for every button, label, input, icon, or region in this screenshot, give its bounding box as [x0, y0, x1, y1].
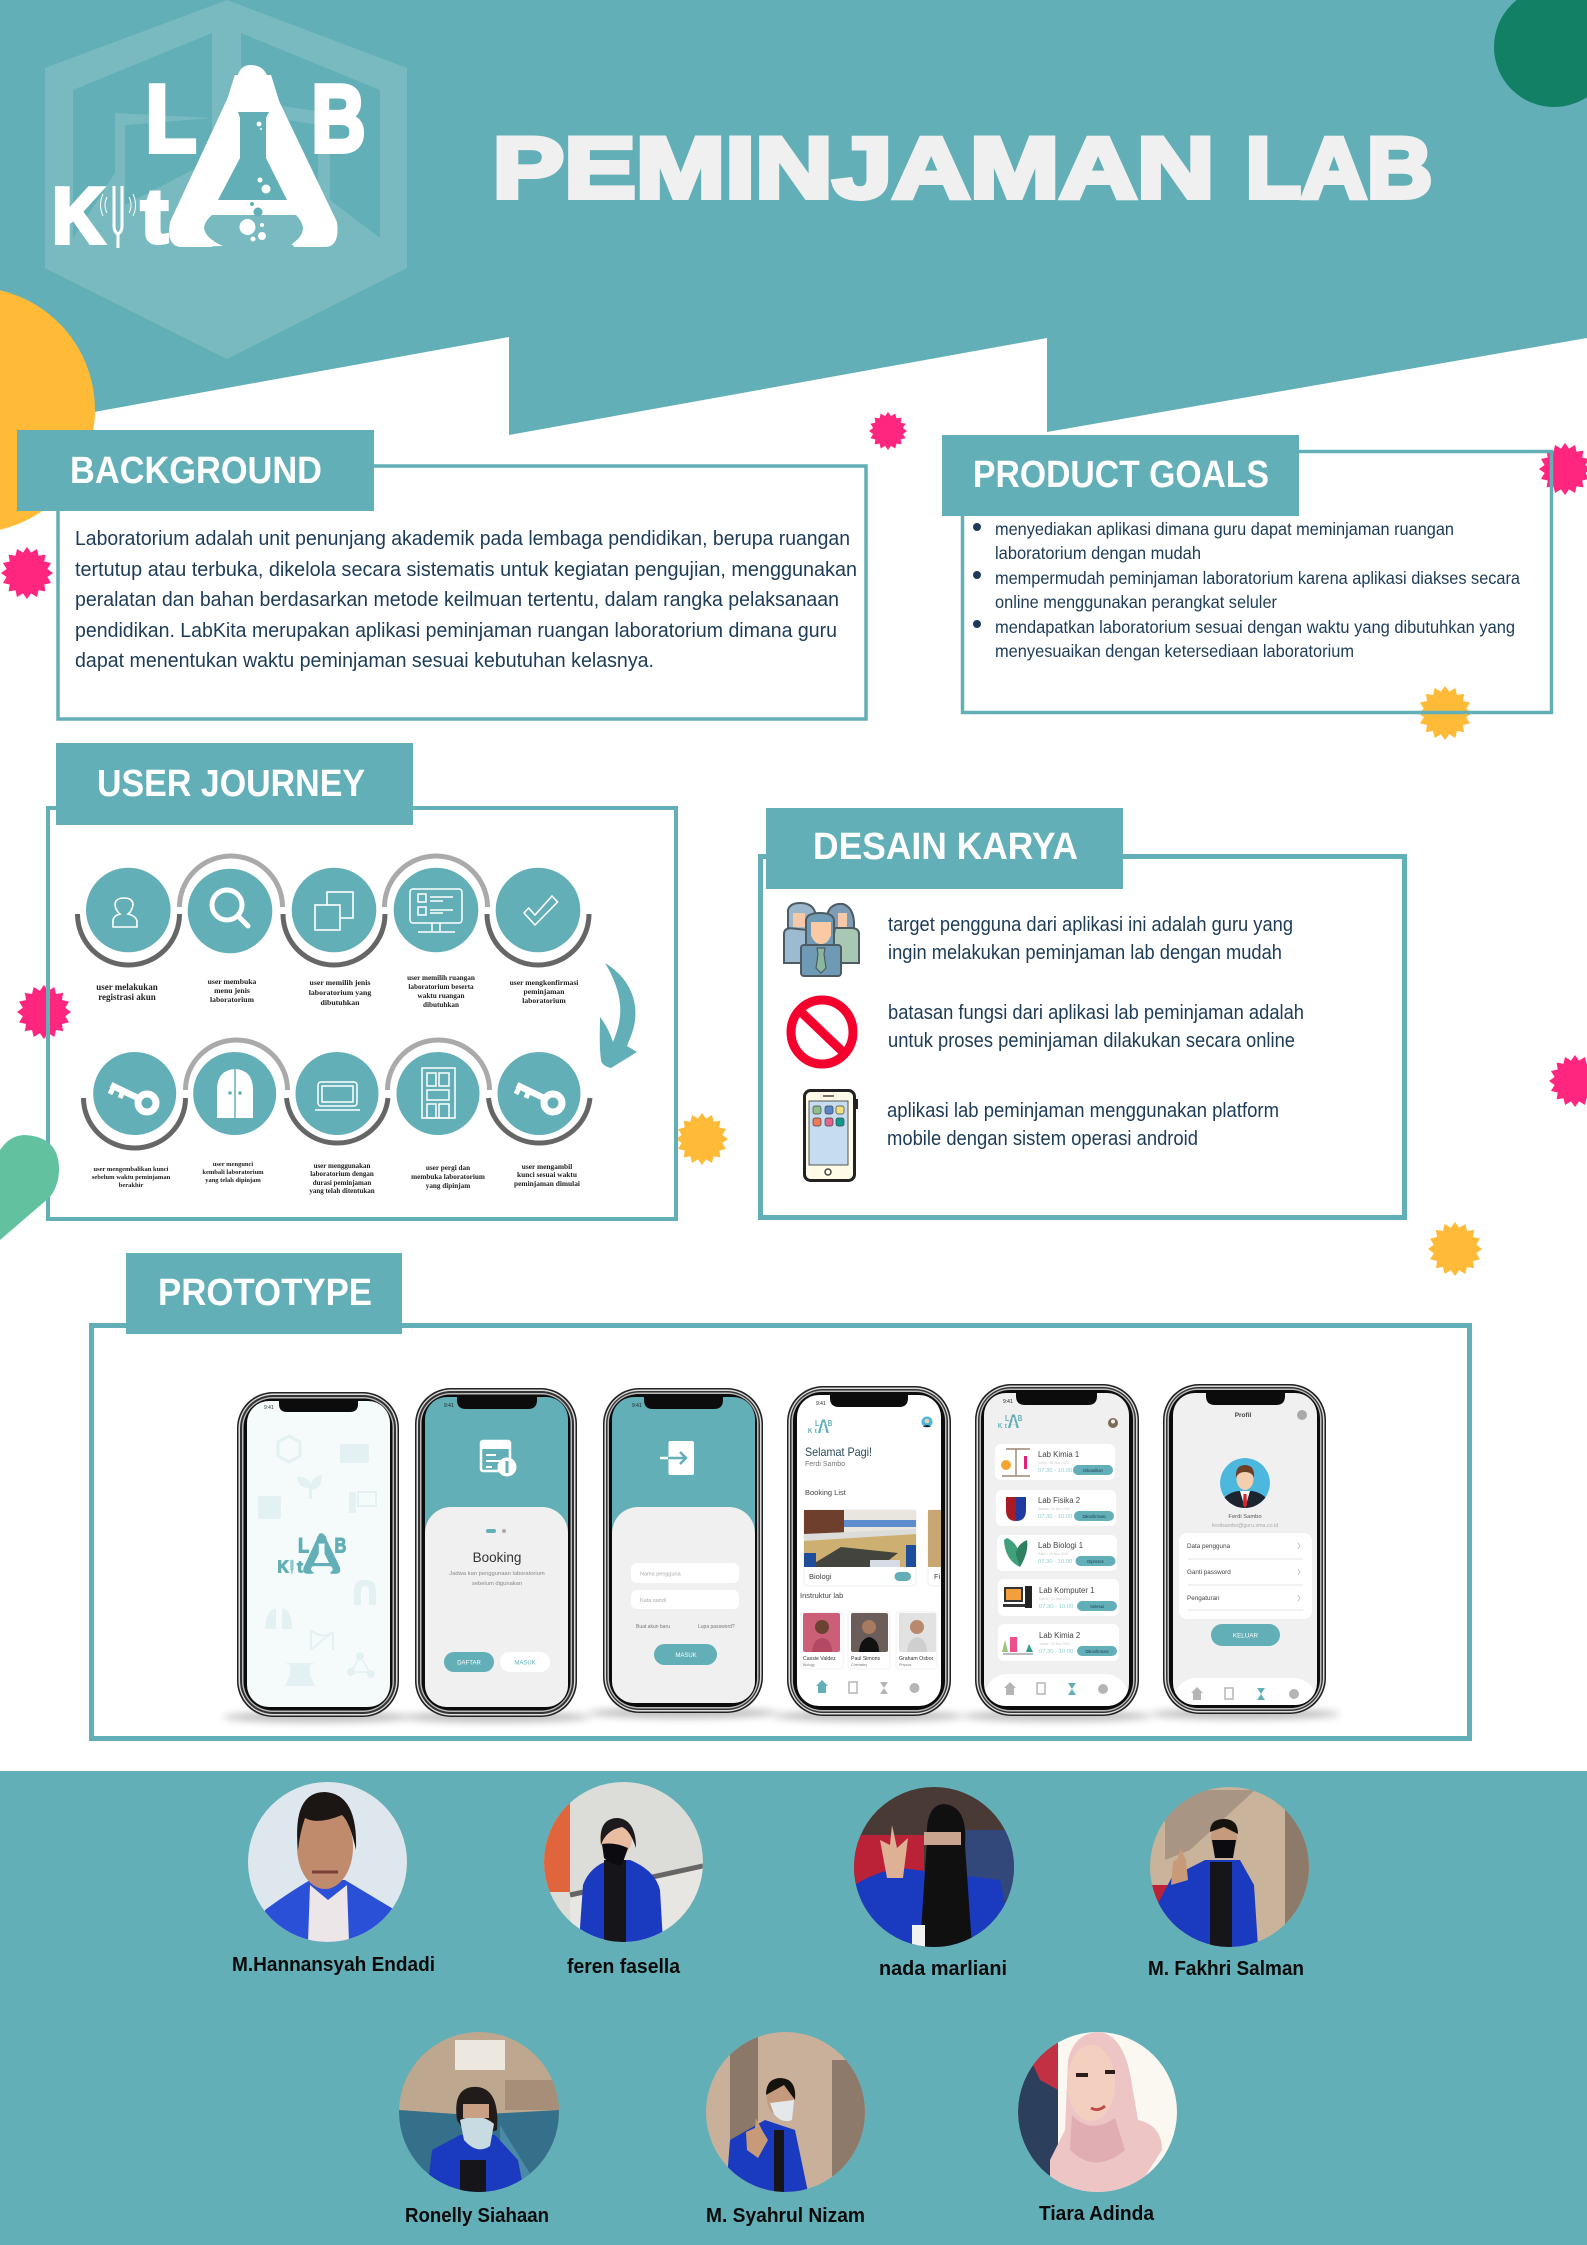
heading: product goals: PRODUCT GOALS [973, 454, 1269, 496]
team member 1: M.Hannansyah Endadi [232, 1954, 435, 1976]
labels row 2: user mengambil [522, 1162, 572, 1171]
icon: search [212, 890, 248, 926]
header banner [0, 0, 1587, 435]
labels row 1: dibutuhkan [423, 1001, 459, 1009]
phone 1: splash [237, 1392, 399, 1717]
icon: calendar [481, 1441, 516, 1476]
avatar [1219, 1458, 1271, 1510]
instructor cards: Chemistry [851, 1663, 867, 1667]
title: PEMINJAMAN [492, 120, 1214, 216]
phone 6: profile: Profil [1235, 1412, 1251, 1419]
logo small: B [335, 1534, 346, 1557]
title [492, 120, 1432, 216]
labels row 1: user memilih ruangan [407, 974, 475, 982]
team member 6 [706, 2032, 866, 2227]
labels row 2: kunci sesuai waktu [517, 1170, 577, 1179]
icon: mobile phone [804, 1090, 858, 1180]
lab photo card: Biologi [809, 1572, 832, 1581]
icon: double door [217, 1069, 253, 1118]
card titles: Lab Biologi 1 [1038, 1541, 1083, 1550]
logo small: K [998, 1423, 1002, 1430]
phone 2: onboarding: Jadwa kan penggunaan laboratorium [449, 1571, 545, 1577]
labels row 1 [96, 974, 578, 1009]
icon: copies [315, 892, 353, 930]
heading: background: BACKGROUND [70, 450, 322, 492]
heading: prototype: PROTOTYPE [158, 1272, 372, 1314]
decorative burst: yellow desain [1428, 1222, 1482, 1276]
labels row 1: menu jenis [214, 986, 250, 995]
labels row 2: durasi peminjaman [313, 1179, 371, 1187]
icon: check [524, 896, 558, 925]
text: function limits: batasan fungsi dari aplikasi lab peminjaman adalah [888, 1002, 1304, 1024]
logo small: L [1005, 1413, 1009, 1423]
card times: 07.30 - 10.00 [1038, 1559, 1072, 1565]
card times: 07.30 - 10.00 [1039, 1604, 1073, 1610]
labels row 1: laboratorium beserta [408, 983, 474, 991]
card titles: Lab Fisika 2 [1038, 1496, 1080, 1505]
second card: Fi [934, 1572, 941, 1581]
card dates: Jumat / 22 Nov 2022 [1039, 1642, 1070, 1646]
settings card: Ganti password [1187, 1569, 1231, 1576]
instructor cards: Physics [899, 1663, 912, 1667]
phone 3: login: Buat akun baru [636, 1624, 670, 1630]
icon: door [422, 1068, 455, 1118]
icon: sign in door [660, 1441, 694, 1475]
status labels: Selesai [1090, 1604, 1104, 1609]
icon: laptop [315, 1082, 360, 1110]
phone 3: login: MASUK [675, 1653, 697, 1659]
labels row 2: user mengembalikan kunci [93, 1166, 169, 1173]
labels row 2: membuka laboratorium [411, 1173, 485, 1181]
logo small: t [297, 1557, 303, 1576]
logo small: L [815, 1418, 819, 1428]
logo small: K [278, 1556, 289, 1576]
decorative circle: yellow left [0, 287, 95, 533]
card dates: Kamis / 21 Nov 2022 [1039, 1597, 1071, 1601]
decorative burst: yellow centre [676, 1113, 728, 1165]
phone 4: home: 9:41 [816, 1401, 826, 1407]
card titles [1038, 1450, 1094, 1640]
team member 7 [1018, 2032, 1178, 2225]
instructor cards [801, 1612, 937, 1669]
nav bar [816, 1680, 920, 1694]
icon: prohibited [791, 1000, 853, 1064]
labels row 1: laboratorium yang [309, 988, 371, 997]
panel: product goals [942, 435, 1552, 712]
phone 6: profile: KELUAR [1233, 1632, 1259, 1640]
logo: LabKita: t [141, 174, 168, 260]
text: function limits [888, 1002, 1304, 1052]
logo small: B [828, 1418, 832, 1428]
text: background body [75, 527, 857, 672]
team band [0, 1771, 1587, 2245]
team member 2: feren fasella [567, 1956, 681, 1978]
text: platform: mobile dengan sistem operasi android [887, 1128, 1198, 1150]
text: target users [888, 914, 1293, 964]
logo small: t [815, 1428, 818, 1435]
decorative burst: pink far right [1549, 1055, 1587, 1107]
status labels: Dibatalkan [1083, 1468, 1104, 1473]
card times: 07.30 - 10.00 [1039, 1649, 1073, 1655]
phone 4: home: Booking List [805, 1488, 847, 1497]
text: platform: aplikasi lab peminjaman menggunakan platform [887, 1100, 1279, 1122]
logo: LabKita: L [146, 66, 196, 172]
list: product goals: mempermudah peminjaman laboratorium karena aplikasi diakses secara [995, 568, 1520, 588]
phone 2: onboarding: 9:41 [444, 1403, 454, 1409]
arcs row 2 [84, 1040, 590, 1148]
logo small: B [1018, 1413, 1022, 1423]
logo small [278, 1523, 346, 1585]
labels row 1: laboratorium [210, 995, 255, 1004]
icon: people [784, 903, 859, 976]
text: background body: pendidikan. LabKita merupakan aplikasi peminjaman ruangan laboratorium dimana guru [75, 619, 837, 642]
phone 5: lab list [975, 1384, 1139, 1734]
nav bar [1004, 1682, 1108, 1695]
text: function limits: untuk proses peminjaman dilakukan secara online [888, 1030, 1295, 1052]
phone shadows [223, 1708, 1340, 1722]
list: product goals: laboratorium dengan mudah [995, 543, 1201, 563]
team member 3 [854, 1787, 1014, 1980]
logo small: A [305, 1523, 339, 1585]
labels row 2: user menggunakan [314, 1162, 371, 1170]
team member 5 [399, 2032, 559, 2227]
phone 3: login [603, 1388, 763, 1747]
nav bar [1191, 1687, 1299, 1700]
card times: 07.30 - 10.00 [1038, 1468, 1072, 1474]
second card [928, 1510, 941, 1586]
logo small: A [818, 1417, 829, 1438]
labels row 1: user membuka [208, 977, 257, 986]
icon: user [113, 898, 137, 927]
team member 5: Ronelly Siahaan [405, 2205, 549, 2227]
phone 4: home: Instruktur lab [800, 1591, 843, 1600]
booking cards [995, 1444, 1119, 1661]
panel: background [17, 430, 866, 719]
labels row 2: yang telah ditentukan [309, 1187, 375, 1195]
list: product goals [973, 519, 1520, 661]
card titles: Lab Kimia 1 [1038, 1450, 1079, 1459]
text: background body: Laboratorium adalah unit penunjang akademik pada lembaga pendidikan, berupa ruangan [75, 527, 850, 550]
arcs row 1 [78, 856, 589, 965]
text: background body: dapat menentukan waktu peminjaman sesuai kebutuhan kelasnya. [75, 649, 654, 672]
labels row 2: yang dipinjam [426, 1182, 470, 1190]
phone 6: profile: ferdisambo@guru.sma.co.id [1212, 1523, 1278, 1529]
logo small: L [298, 1534, 309, 1557]
card icons [1001, 1449, 1033, 1654]
labels row 1: laboratorium [522, 996, 566, 1005]
status labels [1082, 1468, 1109, 1654]
lab photo card [804, 1510, 916, 1586]
icon: key [110, 1085, 156, 1112]
settings card [1179, 1533, 1312, 1619]
labels row 2: yang telah dipinjam [205, 1177, 261, 1184]
logo small: K [808, 1428, 812, 1435]
phone 3: login: 9:41 [632, 1403, 642, 1409]
list: product goals: menyesuaikan dengan ketersediaan laboratorium [995, 641, 1354, 661]
circles row 1 [86, 868, 580, 953]
settings card: Data pengguna [1187, 1543, 1231, 1550]
status labels: Dikonfirmasi [1085, 1649, 1109, 1654]
labels row 2: user mengunci [213, 1161, 253, 1168]
labels row 1: dibutuhkan [320, 998, 360, 1007]
phone 6: profile: Ferdi Sambo [1228, 1514, 1262, 1520]
decorative burst: pink journey [17, 985, 71, 1039]
labels row 2: sebelum waktu peminjaman [92, 1174, 171, 1181]
labels row 1: user melakukan [96, 982, 158, 992]
card titles: Lab Kimia 2 [1039, 1631, 1080, 1640]
status labels: Diproses [1087, 1559, 1104, 1564]
instructor cards: Cassie Valdez [803, 1656, 836, 1662]
heading: desain karya: DESAIN KARYA [813, 826, 1078, 868]
phone 5: lab list: 9:41 [1003, 1399, 1013, 1405]
logo: LabKita: B [312, 66, 366, 172]
panel: prototype [92, 1253, 1470, 1747]
faint science icons [258, 1436, 376, 1686]
card titles: Lab Komputer 1 [1039, 1586, 1094, 1595]
labels row 2: user pergi dan [426, 1164, 470, 1172]
decorative leaf: green [0, 1135, 59, 1240]
status pills [1073, 1465, 1117, 1656]
icon: key 2 [516, 1085, 562, 1112]
card dates [1038, 1461, 1071, 1646]
text: target users: target pengguna dari aplikasi ini adalah guru yang [888, 914, 1293, 936]
text: platform [887, 1100, 1279, 1150]
arrow: turn to next row [600, 963, 637, 1068]
text: target users: ingin melakukan peminjaman lab dengan mudah [888, 942, 1282, 964]
decorative burst: pink right [1539, 443, 1587, 495]
phone 2: onboarding: sebelum digunakan [472, 1581, 522, 1587]
logo small: A [1008, 1412, 1019, 1433]
heading: user journey: USER JOURNEY [97, 763, 365, 805]
instructor cards: Paul Simons [851, 1656, 881, 1662]
phone 2: onboarding: MASUK [514, 1660, 536, 1666]
labels row 1: user memilih jenis [310, 978, 370, 987]
decorative burst: yellow goals [1418, 686, 1472, 740]
labels row 2: kembali laboratorium [202, 1169, 264, 1176]
text: background body: tertutup atau terbuka, dikelola secara sistematis untuk kegiatan pengujian, menggunakan [75, 558, 857, 581]
icon: monitor checklist [410, 889, 462, 932]
labels row 1: user mengkonfirmasi [510, 978, 578, 987]
logo small [998, 1414, 1022, 1428]
labels row 1: peminjaman [524, 987, 565, 996]
labels row 1: waktu ruangan [418, 992, 464, 1000]
title: LAB [1246, 120, 1432, 216]
phone 4: home [787, 1386, 951, 1716]
panel: user journey [48, 743, 676, 1219]
card dates: Selasa / 20 Nov 2022 [1038, 1507, 1071, 1511]
phone 2: onboarding: DAFTAR [457, 1660, 481, 1666]
phone 4: home: Selamat Pagi! [805, 1445, 872, 1459]
card dates: Senin / 18 Nov 2022 [1038, 1461, 1069, 1465]
phone 2: onboarding: Booking [473, 1550, 521, 1565]
team member 7: Tiara Adinda [1039, 2203, 1155, 2225]
phone 3: login: Nama pengguna [640, 1572, 682, 1578]
decorative burst: pink top centre [869, 412, 907, 450]
phone 1: splash: 9:41 [264, 1405, 274, 1411]
labels row 2: laboratorium dengan [310, 1170, 374, 1178]
labels row 2: peminjaman dimulai [514, 1179, 580, 1188]
team member 2 [544, 1782, 704, 1978]
logo small: t [1005, 1423, 1008, 1430]
phone 6: profile [1163, 1384, 1326, 1738]
team member 4 [1148, 1787, 1310, 1980]
labels row 1: registrasi akun [98, 992, 156, 1002]
card times [1038, 1468, 1073, 1655]
labels row 2 [92, 1161, 580, 1195]
team member 3: nada marliani [879, 1958, 1007, 1980]
instructor cards: Graham Osbor [899, 1656, 934, 1662]
card dates: Rabu / 20 Nov 2022 [1038, 1552, 1068, 1556]
status labels: Dikonfirmasi [1082, 1514, 1106, 1519]
list: product goals: menyediakan aplikasi dimana guru dapat meminjaman ruangan [995, 519, 1454, 539]
circles row 2 [93, 1052, 580, 1135]
logo: LabKita [52, 21, 366, 300]
team member 1 [232, 1782, 435, 1976]
instructor cards: Biology [803, 1663, 815, 1667]
decorative burst: pink left [1, 547, 53, 599]
team member 4: M. Fakhri Salman [1148, 1958, 1304, 1980]
settings card: Pengaturan [1187, 1595, 1220, 1602]
logo: hexagon watermark [45, 0, 407, 359]
logo: LabKita: A [176, 21, 330, 300]
team member 6: M. Syahrul Nizam [706, 2205, 865, 2227]
logo small [808, 1420, 832, 1433]
panel: desain karya [760, 808, 1404, 1218]
phone 3: login: Lupa password? [698, 1624, 735, 1630]
labels row 2: berakhir [119, 1182, 143, 1189]
phone 2: onboarding [415, 1388, 577, 1747]
list: product goals: mendapatkan laboratorium sesuai dengan waktu yang dibutuhkan yang [995, 617, 1515, 637]
decorative circle: green top right [1494, 0, 1587, 107]
text: background body: peralatan dan bahan berdasarkan metode keilmuan tertentu, dalam rangka pelaksanaan [75, 588, 839, 611]
list: product goals: online menggunakan perangkat seluler [995, 592, 1277, 612]
card times: 07.30 - 10.00 [1038, 1514, 1072, 1520]
phone 4: home: Ferdi Sambo [805, 1461, 845, 1468]
phone 3: login: Kata sandi [640, 1598, 666, 1604]
logo: LabKita: K [52, 172, 104, 260]
